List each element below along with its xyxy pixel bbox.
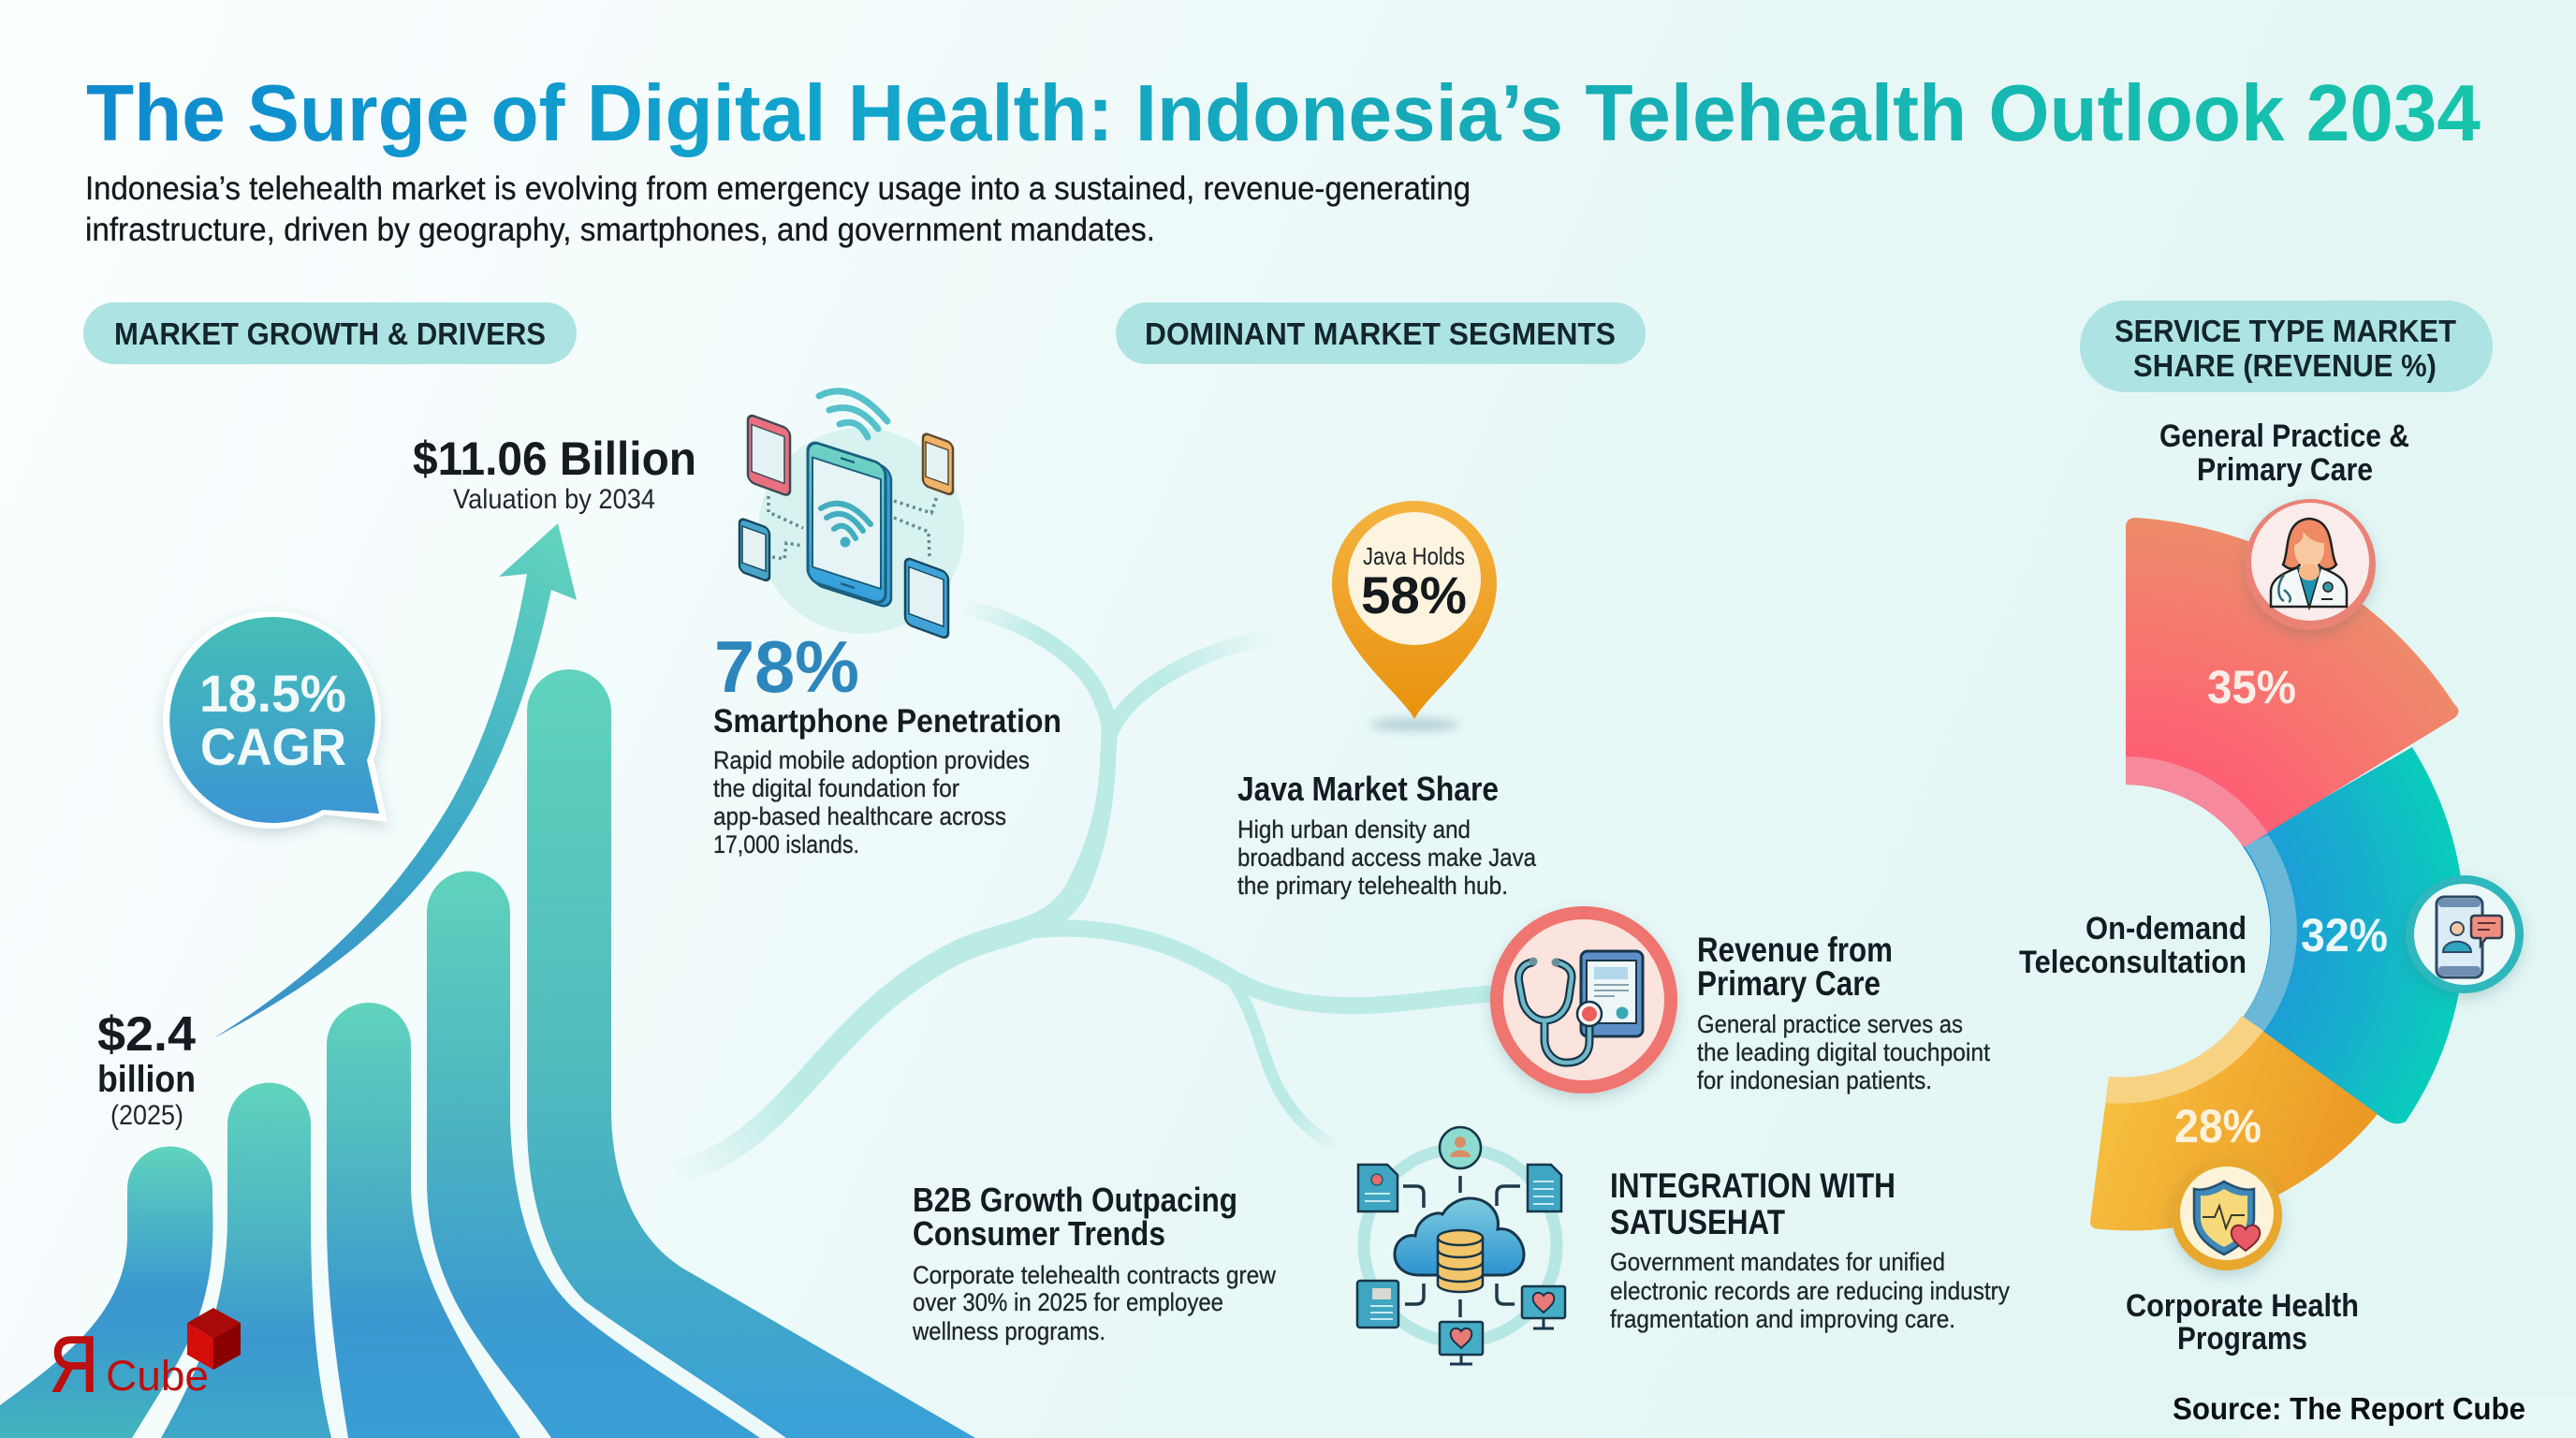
icon: Java map pin: Java Holds [1363, 542, 1465, 570]
text: B2B growth: B2B Growth Outpacing [913, 1181, 1237, 1219]
bar 5 [527, 669, 975, 1438]
text: Java market share: High urban density and [1237, 815, 1471, 844]
label: on-demand teleconsultation: Teleconsultation [2019, 945, 2247, 980]
text: B2B growth: wellness programs. [912, 1317, 1105, 1345]
stat: smartphone penetration: 17,000 islands. [713, 830, 859, 858]
heading: market growth and drivers: MARKET GROWTH & DRIVERS [114, 316, 546, 351]
2025 value label: $2.4 [97, 1007, 196, 1062]
stat: smartphone penetration: 78% [714, 625, 859, 708]
text: Java market share: the primary telehealth hub. [1237, 872, 1508, 900]
bar 4 [427, 871, 760, 1438]
label: corporate health programs: Programs [2177, 1321, 2307, 1357]
2025 value label: (2025) [110, 1100, 183, 1131]
icon: stethoscope and tablet [1490, 906, 1677, 1093]
text: integration with SATUSEHAT: SATUSEHAT [1610, 1203, 1785, 1241]
subtitle: infrastructure, driven by geography, smartphones, and government mandates. [85, 212, 1155, 248]
text: integration with SATUSEHAT: fragmentation and improving care. [1610, 1305, 1955, 1333]
bar chart: market growth columns [0, 669, 975, 1438]
text: integration with SATUSEHAT: INTEGRATION WITH [1610, 1167, 1895, 1205]
icon: Java map pin [1332, 501, 1497, 731]
text: Java market share: broadband access make Java [1237, 844, 1537, 872]
callout: CAGR bubble [163, 611, 388, 829]
2025 value label: billion [97, 1059, 196, 1100]
chart: service type donut [2090, 518, 2465, 1231]
text: Java market share [1237, 770, 1537, 900]
icon: connected smartphones [739, 391, 964, 639]
subtitle: Indonesia’s telehealth market is evolving from emergency usage into a sustained, revenue-generating [85, 170, 1471, 207]
heading: service type market share [2080, 301, 2493, 392]
stat: smartphone penetration: Smartphone Penetration [713, 703, 1061, 740]
text: B2B growth: Consumer Trends [913, 1214, 1165, 1253]
bar 2 [161, 1082, 331, 1438]
icon: Java map pin: 58% [1361, 565, 1467, 624]
text: Java market share: Java Market Share [1237, 770, 1499, 808]
callout: CAGR bubble: CAGR [200, 717, 346, 776]
heading: dominant market segments: DOMINANT MARKET SEGMENTS [1145, 316, 1616, 351]
text: integration with SATUSEHAT [1610, 1167, 2010, 1333]
text: revenue from primary care [1697, 931, 1990, 1094]
stat: smartphone penetration: app-based healthcare across [713, 802, 1006, 830]
donut percent labels [2174, 661, 2388, 1152]
subtitle [85, 170, 1471, 248]
growth arrow [213, 523, 577, 1038]
callout: CAGR bubble: 18.5% [199, 664, 346, 723]
heading: service type market share: SERVICE TYPE MARKET [2115, 314, 2456, 348]
text: B2B growth [912, 1181, 1276, 1345]
slice: on-demand teleconsultation [2242, 747, 2465, 1123]
bar 1 [0, 1146, 213, 1438]
icon: doctor [2245, 499, 2376, 630]
label: general practice [2159, 418, 2409, 488]
title: The Surge of Digital Health: Indonesia’s Telehealth Outlook 2034 [86, 69, 2481, 158]
text: revenue from primary care: General practice serves as [1697, 1010, 1963, 1038]
donut percent labels: 35% [2207, 661, 2296, 713]
label: on-demand teleconsultation [2019, 911, 2247, 980]
heading: dominant market segments [1116, 302, 1646, 364]
logo: RCube: Cube [106, 1352, 209, 1400]
stat: smartphone penetration [713, 625, 1061, 858]
heading: market growth and drivers [83, 302, 577, 364]
label: on-demand teleconsultation: On-demand [2086, 911, 2247, 946]
stat: smartphone penetration: the digital foundation for [713, 774, 959, 802]
label: corporate health programs: Corporate Health [2126, 1288, 2359, 1324]
text: integration with SATUSEHAT: electronic records are reducing industry [1610, 1277, 2010, 1305]
slice: general practice and primary care [2126, 518, 2458, 847]
2025 value label [97, 1007, 196, 1131]
icon: shield with heart [2172, 1160, 2282, 1270]
icon: cloud records network [1357, 1127, 1565, 1364]
2034 valuation label: Valuation by 2034 [453, 484, 655, 515]
logo: RCube [50, 1308, 241, 1408]
stat: smartphone penetration: Rapid mobile adoption provides [713, 746, 1030, 774]
logo: RCube: Я [50, 1320, 98, 1408]
donut percent labels: 28% [2174, 1100, 2261, 1152]
2034 valuation label [413, 433, 696, 515]
text: B2B growth: over 30% in 2025 for employee [913, 1288, 1223, 1316]
2034 valuation label: $11.06 Billion [413, 433, 696, 485]
heading: service type market share: SHARE (REVENUE %) [2133, 348, 2437, 383]
text: revenue from primary care: for indonesian patients. [1697, 1066, 1932, 1094]
donut percent labels: 32% [2301, 909, 2388, 961]
text: revenue from primary care: Revenue from [1697, 931, 1893, 969]
text: revenue from primary care: the leading digital touchpoint [1697, 1038, 1990, 1066]
connector streams [670, 607, 1498, 1174]
source note: Source: The Report Cube [2173, 1391, 2525, 1426]
label: corporate health programs [2126, 1288, 2359, 1357]
text: B2B growth: Corporate telehealth contracts grew [913, 1261, 1276, 1289]
text: integration with SATUSEHAT: Government mandates for unified [1610, 1248, 1945, 1276]
label: general practice: Primary Care [2197, 452, 2373, 488]
icon: video consult phone [2406, 875, 2524, 993]
bar 3 [327, 1003, 520, 1438]
slice: corporate health programs [2090, 1016, 2378, 1231]
label: general practice: General Practice & [2159, 418, 2409, 454]
text: revenue from primary care: Primary Care [1697, 964, 1881, 1003]
